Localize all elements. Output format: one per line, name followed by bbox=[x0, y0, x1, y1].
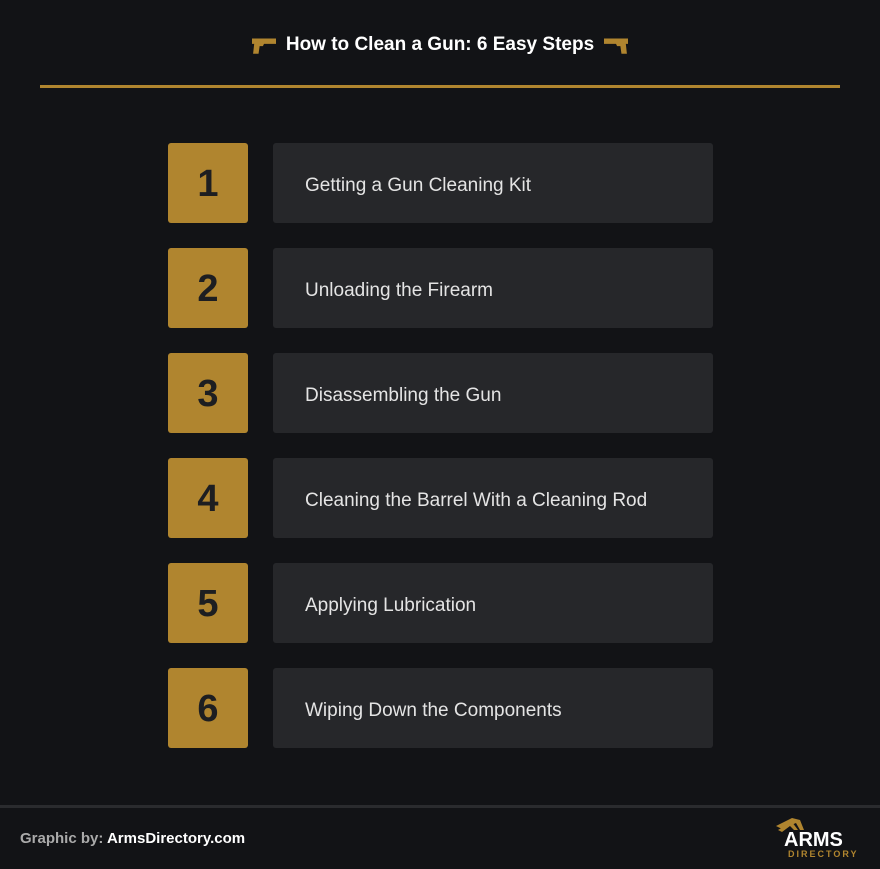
step 4: 4 bbox=[197, 478, 219, 520]
step 6: Wiping Down the Components bbox=[305, 700, 562, 720]
step 1: Getting a Gun Cleaning Kit bbox=[305, 174, 531, 196]
step 5: 5 bbox=[197, 582, 219, 624]
step 1 bbox=[168, 143, 713, 223]
step 4: Cleaning the Barrel With a Cleaning Rod bbox=[305, 490, 647, 510]
title: How to Clean a Gun: 6 Easy Steps bbox=[286, 34, 594, 55]
icon: gun left bbox=[252, 38, 276, 54]
step 1: 1 bbox=[197, 162, 219, 204]
step 3: 3 bbox=[197, 372, 219, 414]
step 2: Unloading the Firearm bbox=[305, 280, 493, 300]
step 5: Applying Lubrication bbox=[305, 594, 476, 616]
step 3 bbox=[168, 353, 713, 433]
step 2 bbox=[168, 248, 713, 328]
step 6 bbox=[168, 668, 713, 748]
step 2: 2 bbox=[197, 268, 219, 310]
logo: ARMS bbox=[784, 829, 843, 851]
step 6: 6 bbox=[197, 688, 219, 730]
footer credit: Graphic by: ArmsDirectory.com bbox=[20, 830, 245, 847]
step 4 bbox=[168, 458, 713, 538]
step 3: Disassembling the Gun bbox=[305, 384, 501, 406]
step 5 bbox=[168, 563, 713, 643]
logo bbox=[776, 818, 859, 859]
logo: DIRECTORY bbox=[788, 849, 859, 859]
icon: gun right bbox=[604, 38, 628, 54]
